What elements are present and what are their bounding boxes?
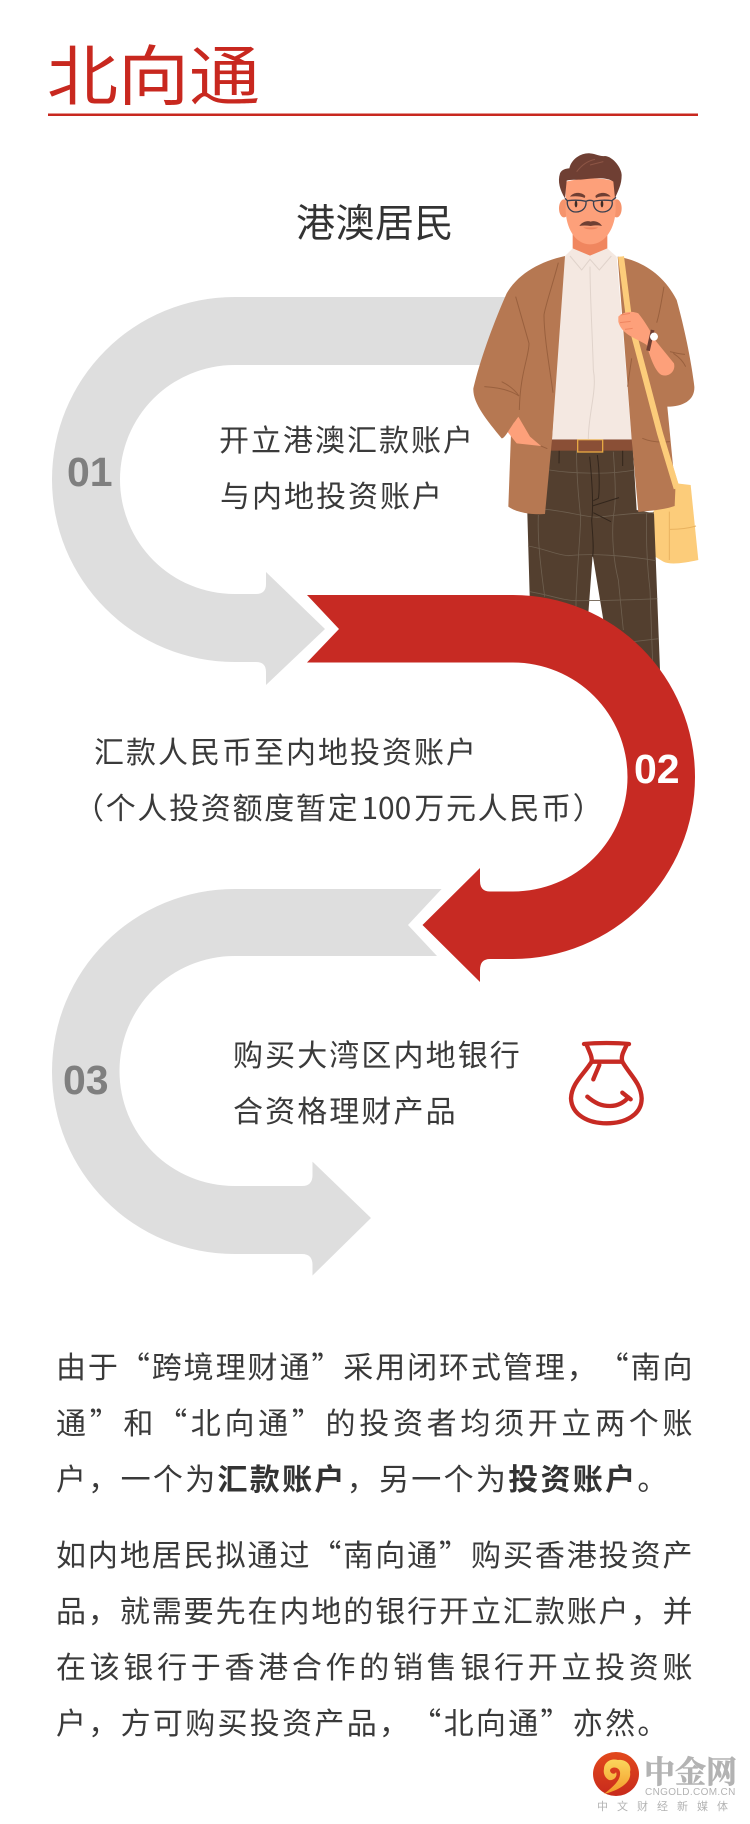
belt — [551, 439, 632, 451]
title rule — [48, 114, 698, 116]
step 2 text: 汇款人民币至内地投资账户 — [94, 728, 478, 772]
paragraph 2: 在该银行于香港合作的销售银行开立投资账 — [56, 1643, 694, 1687]
step 2 text: （个人投资额度暂定100万元人民币） — [74, 784, 604, 828]
paragraph 2 — [56, 1531, 694, 1743]
jacket right — [618, 257, 694, 512]
step 1 text — [219, 416, 475, 516]
shirt — [552, 248, 632, 439]
step 1 text: 与内地投资账户 — [220, 472, 444, 516]
bag strap — [621, 257, 677, 488]
belt buckle — [578, 440, 603, 452]
hair — [559, 153, 622, 198]
logo text: CNGOLD.COM.CN — [645, 1787, 736, 1798]
trousers — [527, 440, 660, 670]
step 1 number: 01 — [67, 449, 113, 495]
step 3 text: 购买大湾区内地银行 — [233, 1031, 522, 1075]
arrow: step 1 grey — [52, 297, 505, 685]
paragraph 1: 由于“跨境理财通”采用闭环式管理，“南向 — [56, 1343, 694, 1387]
bag — [653, 483, 698, 563]
step 3 number: 03 — [63, 1057, 109, 1103]
strap over jacket — [621, 257, 677, 488]
moustache — [583, 227, 598, 229]
heading: residents: 港澳居民 — [296, 193, 454, 249]
eyebrows — [570, 193, 611, 198]
logo text: 中文财经新媒体 — [597, 1798, 737, 1814]
paragraph 2: 品，就需要先在内地的银行开立汇款账户，并 — [56, 1587, 694, 1631]
hand in pocket — [507, 417, 541, 446]
title: 北向通 — [47, 25, 260, 119]
logo emblem — [593, 1752, 639, 1796]
hand and forearm — [618, 312, 674, 376]
icon: money bag — [571, 1043, 642, 1123]
illustration: man with shoulder bag — [473, 153, 698, 670]
arrow: step 3 grey — [52, 889, 442, 1276]
logo text — [597, 1747, 737, 1814]
paragraph 1: 户，一个为汇款账户，另一个为投资账户。 — [56, 1455, 670, 1499]
step 1 text: 开立港澳汇款账户 — [219, 416, 475, 460]
paragraph 2: 如内地居民拟通过“南向通”购买香港投资产 — [56, 1531, 694, 1575]
logo text: 中金网 — [644, 1747, 737, 1792]
neck and face — [573, 230, 607, 256]
step 3 text: 合资格理财产品 — [233, 1087, 458, 1131]
paragraph 2: 户，方可购买投资产品，“北向通”亦然。 — [56, 1699, 670, 1743]
paragraph 1 — [56, 1343, 694, 1499]
paragraph 1: 通”和“北向通”的投资者均须开立两个账 — [56, 1399, 694, 1443]
arrow: step 2 red — [307, 595, 695, 982]
step 2 text — [74, 728, 604, 828]
jacket lower left — [508, 307, 560, 514]
glasses — [565, 197, 616, 212]
step 2 number: 02 — [634, 746, 680, 792]
step 3 text — [233, 1031, 522, 1131]
watch — [648, 330, 653, 351]
jacket left — [473, 256, 565, 446]
